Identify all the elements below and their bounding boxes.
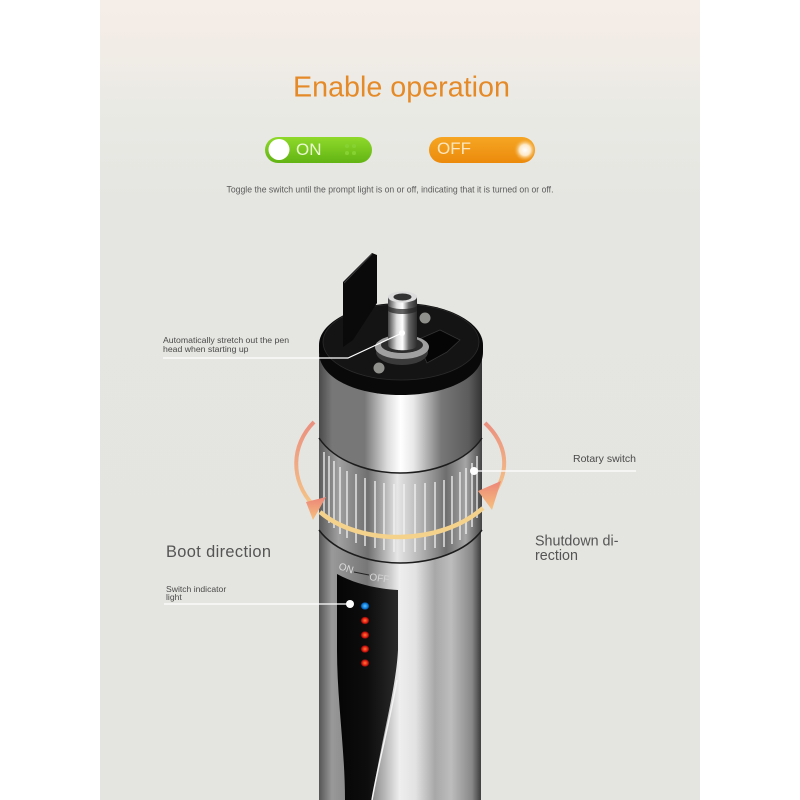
label: shutdown direction: rection [535,548,578,564]
toggle: OFF: OFF [437,139,471,158]
LED red 3 [361,645,369,653]
callout: pen head: Automatically stretch out the pen [163,335,289,345]
LED blue [361,602,369,610]
toggle caption: Toggle the switch until the prompt light is on or off, indicating that it is turned on or off. [226,184,554,194]
pen cap [319,303,483,395]
blade [343,253,377,347]
callout: pen head [163,330,405,358]
arrow: right rotation arc [478,423,504,510]
callout: rotary switch: Rotary switch [573,453,636,465]
cap window [417,330,460,363]
callout: switch indicator light [164,584,354,608]
toggle: ON: ON [296,140,322,159]
arrow: left rotation arc [296,422,326,520]
arrow: bottom yellow arc [320,508,483,537]
ON OFF mark [337,561,390,586]
toggle: ON [265,137,372,163]
label: shutdown direction: Shutdown di- [535,534,619,550]
callout: switch indicator light: light [166,592,182,602]
LED red 4 [361,659,369,667]
LED red 2 [361,631,369,639]
pen body lower [319,510,481,800]
product: fiber pen device [319,253,483,800]
callout: rotary switch [470,453,636,475]
ON OFF mark: ON [337,561,355,576]
indicator panel [337,574,398,800]
ON OFF mark: OFF [369,572,390,586]
pen head [375,292,429,365]
label: shutdown direction [535,534,619,564]
toggle: OFF [429,137,536,163]
pen body upper [319,355,482,490]
callout: switch indicator light: Switch indicator [166,584,226,594]
background panel [100,0,700,800]
LED red 1 [361,617,369,624]
label: boot direction: Boot direction [166,543,271,561]
callout: pen head: head when starting up [163,344,249,354]
rotary ring [319,438,482,563]
title: Enable operation [293,72,510,104]
